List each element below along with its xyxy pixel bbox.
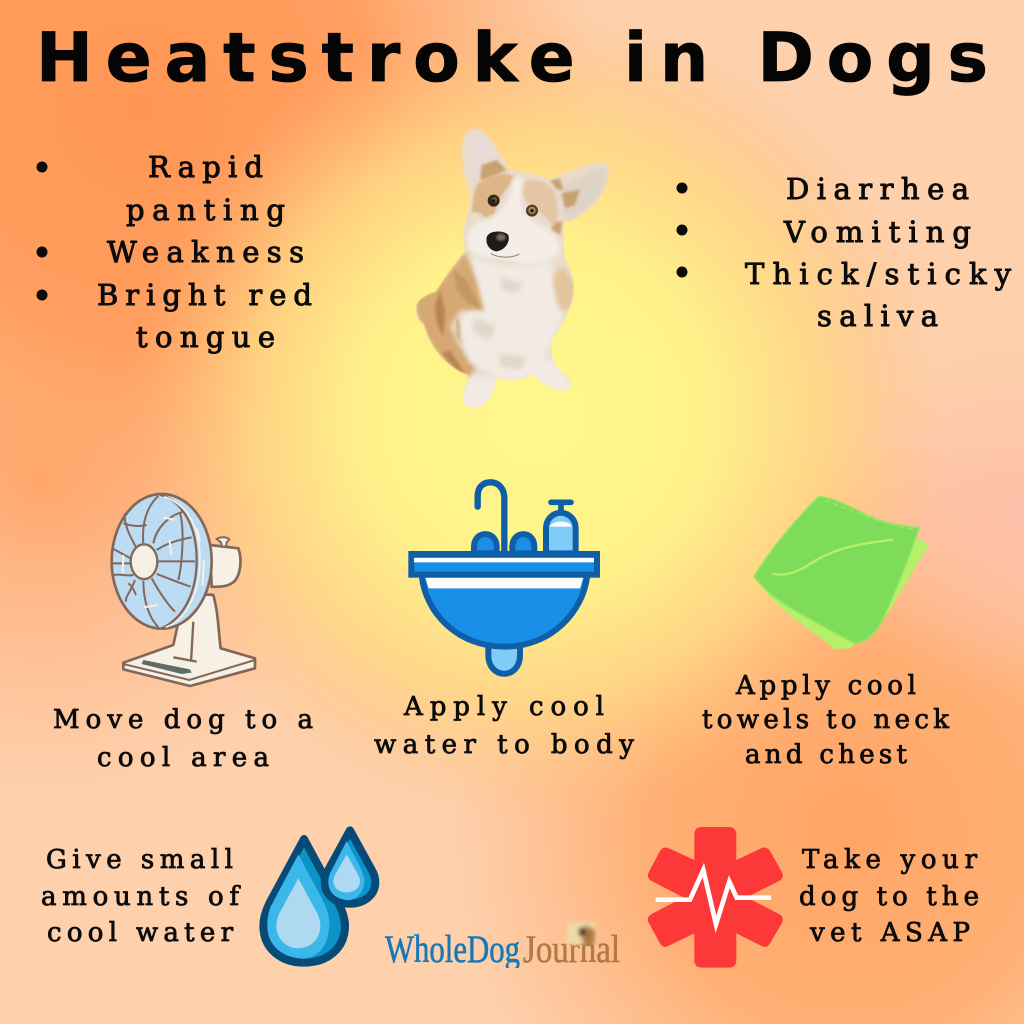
symptom list: left: Rapid (148, 150, 263, 184)
caption: drinking water (41, 845, 241, 948)
logo dog thumbnail (567, 922, 595, 945)
caption: drinking water: amounts of (41, 882, 241, 912)
title: Heatstroke in Dogs (36, 19, 988, 98)
ears (472, 139, 604, 216)
symptom list: right (676, 172, 1012, 333)
caption: cool water to body: Apply cool (403, 692, 604, 722)
chest fur shading (473, 277, 527, 370)
caption: cool towels: and chest (745, 740, 908, 770)
caption: cool water to body (374, 692, 634, 760)
caption: cool towels: Apply cool (735, 671, 916, 701)
symptom list: left (36, 150, 312, 354)
dog nose (486, 231, 509, 251)
symptom list: right: Vomiting (783, 215, 971, 249)
caption: move dog (53, 705, 313, 773)
icon: towel (754, 497, 929, 649)
logo: Whole Dog Journal: WholeDog (385, 928, 520, 971)
caption: drinking water: cool water (47, 918, 234, 948)
caption: vet: Take your (802, 845, 978, 875)
icon: sink (411, 482, 597, 674)
icon: water drops (263, 830, 375, 963)
caption: cool towels: towels to neck (702, 705, 949, 735)
icon: fan (112, 494, 255, 686)
symptom list: left: Weakness (107, 235, 304, 269)
rear and flank tan fur (413, 252, 577, 380)
icon: medical star (648, 827, 783, 968)
logo: Whole Dog Journal: Journal (523, 928, 620, 971)
symptom list: left: tongue (136, 320, 275, 354)
symptom list: right: Diarrhea (786, 172, 969, 206)
caption: cool towels (702, 671, 949, 770)
symptom list: right: Thick/sticky (745, 257, 1012, 291)
caption: move dog: cool area (97, 743, 269, 773)
head tan and white blaze (472, 174, 558, 227)
logo: Whole Dog Journal (385, 922, 620, 971)
symptom list: left: panting (126, 193, 285, 227)
dog eyes (488, 195, 500, 207)
caption: vet (799, 845, 979, 948)
caption: vet: dog to the (799, 882, 979, 912)
dog photo illustration (416, 128, 610, 408)
symptom list: right: saliva (817, 299, 938, 333)
caption: vet: vet ASAP (809, 918, 970, 948)
white chest and legs (460, 257, 573, 410)
caption: cool water to body: water to body (374, 730, 634, 760)
caption: move dog: Move dog to a (53, 705, 313, 735)
caption: drinking water: Give small (46, 845, 233, 875)
symptom list: left: Bright red (97, 278, 312, 312)
